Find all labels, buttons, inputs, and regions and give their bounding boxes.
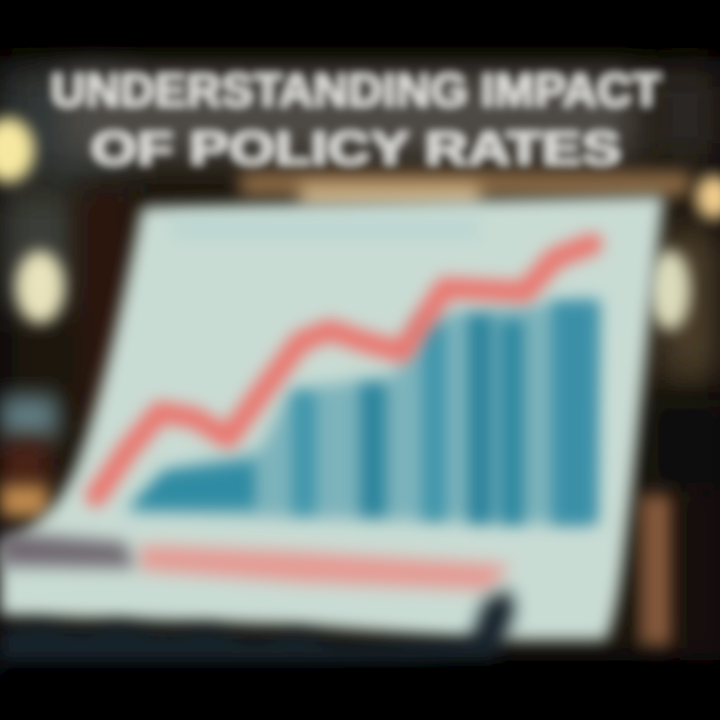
title: OF POLICY RATES <box>91 122 621 174</box>
title: UNDERSTANDING IMPACT <box>51 64 661 116</box>
lower grey band <box>0 532 135 568</box>
paper sheet <box>0 196 664 640</box>
red trend line <box>96 244 592 496</box>
paper top text strip <box>170 218 480 240</box>
lower pink band <box>140 545 510 590</box>
bar chart <box>125 298 600 525</box>
title <box>51 64 661 174</box>
background lights <box>0 118 720 330</box>
